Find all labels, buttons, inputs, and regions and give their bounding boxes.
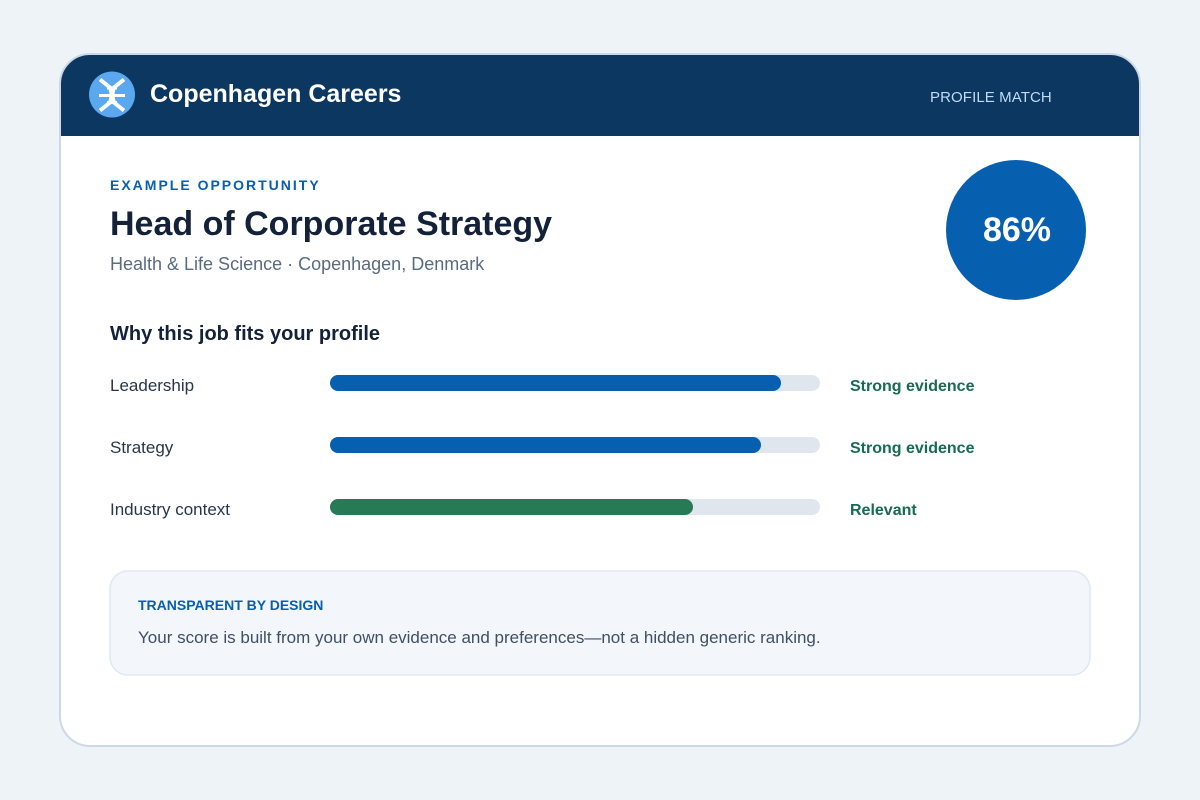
row: industry context: Relevant — [850, 502, 917, 519]
row: strategy — [110, 437, 975, 457]
job title: Head of Corporate Strategy — [110, 205, 552, 243]
section heading: Why this job fits your profile — [110, 323, 380, 345]
row: industry context — [110, 499, 917, 519]
callout: transparency note: Your score is built from your own evidence and preferences—not a hidden generic ranking. — [138, 628, 821, 647]
icon: company logo — [89, 72, 135, 118]
row: strategy: Strategy — [110, 438, 174, 457]
row: strategy: Strong evidence — [850, 440, 975, 457]
score badge — [946, 160, 1086, 300]
row: leadership: Strong evidence — [850, 378, 975, 395]
job details: Health & Life Science · Copenhagen, Denmark — [110, 254, 485, 274]
callout: transparency note — [110, 571, 1090, 675]
panel: profile match card — [60, 54, 1140, 746]
brand name: Copenhagen Careers — [150, 80, 401, 108]
row: industry context: Industry context — [110, 500, 230, 519]
header label: PROFILE MATCH — [930, 89, 1052, 106]
eyebrow: EXAMPLE OPPORTUNITY — [110, 177, 321, 193]
score badge: 86% — [983, 211, 1051, 249]
callout: transparency note: TRANSPARENT BY DESIGN — [138, 597, 323, 613]
row: leadership: Leadership — [110, 376, 194, 395]
row: leadership — [110, 375, 975, 395]
panel: header bar — [60, 54, 1140, 136]
